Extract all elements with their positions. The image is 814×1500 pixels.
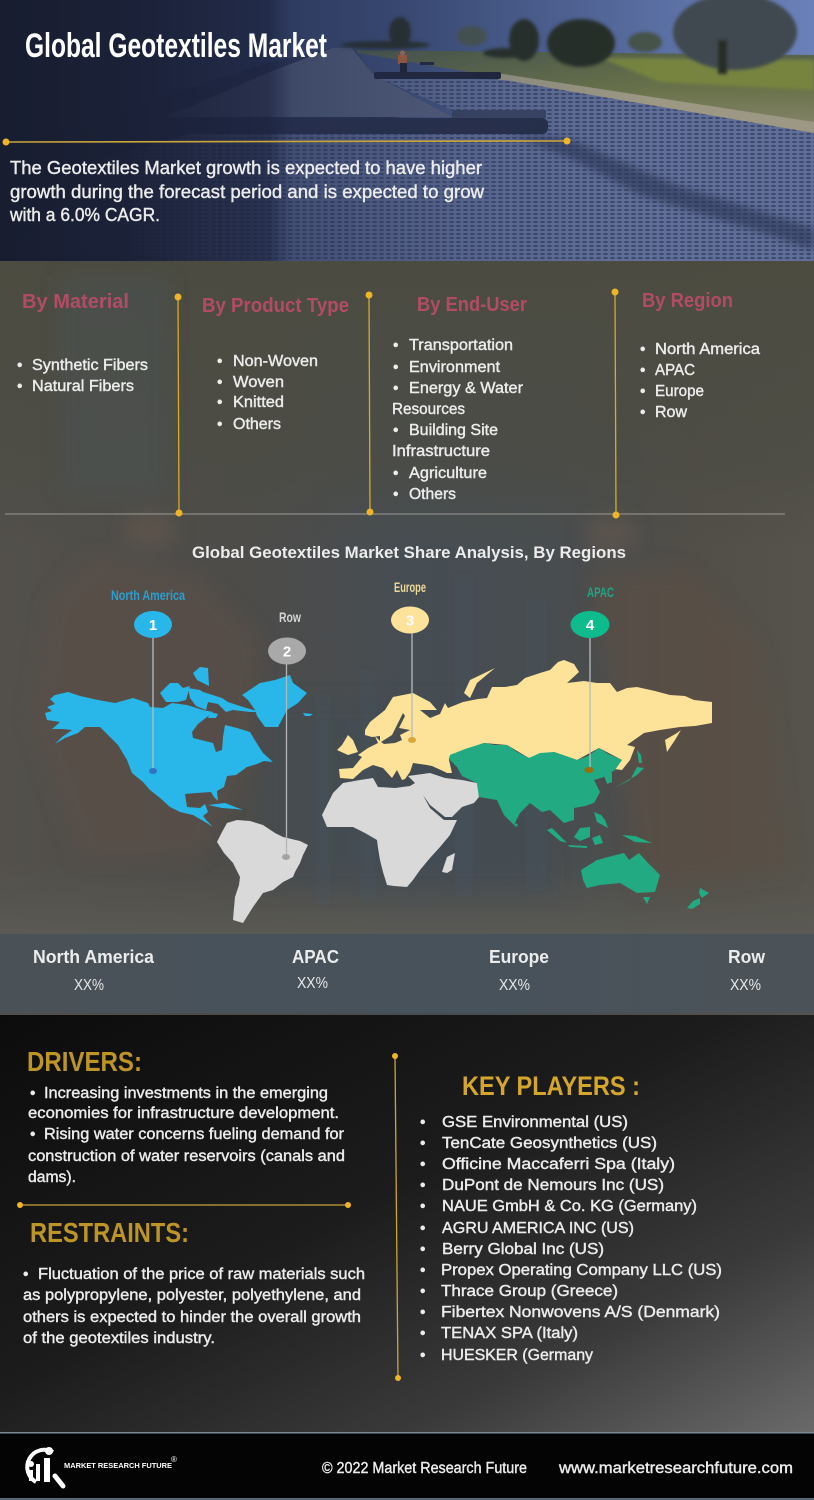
text block: drivers: Increasing investments in the emerging xyxy=(44,1085,328,1102)
list: end-user items: Infrastructure xyxy=(392,443,490,460)
map: South America, Africa and Middle East xyxy=(217,773,479,923)
heading: chart title: Global Geotextiles Market Share Analysis, By Regions xyxy=(192,543,626,562)
panel: by product type xyxy=(202,295,349,433)
list: end-user items: Energy & Water xyxy=(409,380,523,397)
chart: world map by region xyxy=(45,660,712,923)
callout: Row pin: 2 xyxy=(283,644,291,660)
list: material items: Synthetic Fibers xyxy=(32,357,148,374)
list: product type items: Others xyxy=(233,416,281,433)
panel: lower dark background xyxy=(0,1015,814,1433)
list: region items: • xyxy=(640,362,645,379)
list: product type items: • xyxy=(217,416,222,433)
heading: drivers: DRIVERS: xyxy=(27,1046,142,1077)
title: Global Geotextiles Market xyxy=(25,27,327,65)
callout: Europe pin xyxy=(391,579,429,743)
list: end-user items: Others xyxy=(409,486,456,503)
stat: Europe share xyxy=(489,947,549,994)
divider: hero gold line xyxy=(2,138,570,146)
list: key players: • xyxy=(420,1156,425,1173)
list: key players: TenCate Geosynthetics (US) xyxy=(442,1135,657,1152)
list: key players: • xyxy=(420,1347,425,1364)
callout: Europe pin: Europe xyxy=(394,579,426,595)
list: key players: • xyxy=(420,1177,425,1194)
list: region items xyxy=(640,341,760,421)
list: product type items: • xyxy=(217,353,222,370)
stat: North America share: XX% xyxy=(74,977,104,994)
callout: APAC pin xyxy=(570,584,614,773)
list: key players: Propex Operating Company LLC (US) xyxy=(441,1262,722,1279)
list: key players: Officine Maccaferri Spa (Italy) xyxy=(442,1156,675,1173)
text block: drivers: economies for infrastructure development. xyxy=(28,1105,339,1122)
list: key players: GSE Environmental (US) xyxy=(442,1114,628,1131)
list: key players: • xyxy=(420,1325,425,1342)
panel: by material: By Material xyxy=(22,291,129,313)
stat: Europe share: XX% xyxy=(499,977,530,994)
callout: Row pin xyxy=(268,609,306,860)
map: Europe and Russia xyxy=(337,660,712,780)
list: region items: North America xyxy=(655,341,760,358)
list: region items: Europe xyxy=(655,383,704,400)
list: product type items xyxy=(217,353,318,433)
text block: drivers: construction of water reservoirs (canals and xyxy=(28,1148,345,1165)
list: key players: NAUE GmbH & Co. KG (Germany) xyxy=(442,1198,697,1215)
icon: logo xyxy=(27,1447,63,1486)
list: material items xyxy=(17,357,148,395)
list: end-user items: • xyxy=(393,422,398,439)
map: North America xyxy=(45,667,313,827)
list: key players: • xyxy=(420,1262,425,1279)
text block: drivers: dams). xyxy=(28,1169,76,1186)
divider: drivers and restraints xyxy=(17,1202,351,1208)
panel: by product type: By Product Type xyxy=(202,295,349,317)
panel: by region: By Region xyxy=(642,290,733,312)
panel: by end-user xyxy=(392,294,527,503)
list: key players: TENAX SPA (Italy) xyxy=(441,1325,578,1342)
list: end-user items: • xyxy=(393,486,398,503)
text block: restraints: • xyxy=(23,1266,28,1283)
list: product type items: Woven xyxy=(233,374,284,391)
list: end-user items: Building Site xyxy=(409,422,498,439)
logo wordmark xyxy=(64,1455,177,1470)
map: Baltic sea xyxy=(381,713,410,744)
list: end-user items xyxy=(392,337,523,503)
stat: North America share: North America xyxy=(33,947,155,967)
list: key players: AGRU AMERICA INC (US) xyxy=(442,1220,634,1237)
text block: restraints xyxy=(23,1266,365,1347)
list: key players: Thrace Group (Greece) xyxy=(441,1283,618,1300)
callout: APAC pin: APAC xyxy=(587,584,614,600)
callout: North America pin: 1 xyxy=(149,617,157,634)
callout: APAC pin: 4 xyxy=(586,617,595,634)
panel: by material xyxy=(17,291,148,395)
map: Asia Pacific xyxy=(450,743,709,909)
panel: by end-user: By End-User xyxy=(417,294,527,316)
list: key players: • xyxy=(420,1304,425,1321)
panel: by region xyxy=(640,290,760,421)
list: end-user items: • xyxy=(393,359,398,376)
list: region items: Row xyxy=(655,404,688,421)
panel: footer xyxy=(0,1432,814,1500)
list: key players: • xyxy=(420,1283,425,1300)
list: product type items: Knitted xyxy=(233,394,284,411)
panel: region share strip xyxy=(0,934,814,1013)
list: key players: HUESKER (Germany xyxy=(441,1347,593,1364)
stat: APAC share xyxy=(292,947,339,992)
list: key players: • xyxy=(420,1198,425,1215)
copyright: © 2022 Market Research Future xyxy=(322,1460,527,1477)
stat: Row share: XX% xyxy=(730,977,761,994)
list: region items: • xyxy=(640,383,645,400)
text block: restraints: as polypropylene, polyester, polyethylene, and xyxy=(23,1287,361,1304)
list: key players xyxy=(420,1114,722,1364)
list: product type items: • xyxy=(217,394,222,411)
text block: drivers xyxy=(28,1085,345,1186)
list: key players: • xyxy=(420,1220,425,1237)
list: region items: • xyxy=(640,341,645,358)
text block: restraints: others is expected to hinder the overall growth xyxy=(23,1309,361,1326)
list: key players: Fibertex Nonwovens A/S (Denmark) xyxy=(441,1304,720,1321)
dividers: segment columns xyxy=(5,288,785,518)
stat: APAC share: XX% xyxy=(297,975,328,992)
list: material items: • xyxy=(17,378,22,395)
stat: Row share: Row xyxy=(728,947,766,967)
list: end-user items: • xyxy=(393,465,398,482)
list: end-user items: Environment xyxy=(409,359,501,376)
callout: Europe pin: 3 xyxy=(406,612,414,630)
website: www.marketresearchfuture.com xyxy=(558,1460,793,1477)
text block: drivers: • xyxy=(30,1126,35,1143)
text block: intro: with a 6.0% CAGR. xyxy=(9,205,160,225)
stat: Row share xyxy=(728,947,766,994)
text block: drivers: • xyxy=(30,1085,35,1102)
panel: hero photo header xyxy=(0,0,814,261)
list: end-user items: Agriculture xyxy=(409,465,487,482)
list: product type items: Non-Woven xyxy=(233,353,318,370)
heading: restraints: RESTRAINTS: xyxy=(30,1217,189,1248)
logo wordmark: MARKET RESEARCH FUTURE xyxy=(64,1461,172,1470)
callout: Row pin: Row xyxy=(279,609,301,625)
list: end-user items: Transportation xyxy=(409,337,513,354)
stat: Europe share: Europe xyxy=(489,947,549,967)
panel: middle background xyxy=(0,261,814,1015)
callout: North America pin xyxy=(111,587,185,774)
list: key players: • xyxy=(420,1135,425,1152)
list: product type items: • xyxy=(217,374,222,391)
list: key players: • xyxy=(420,1114,425,1131)
list: key players: DuPont de Nemours Inc (US) xyxy=(442,1177,664,1194)
list: region items: • xyxy=(640,404,645,421)
text block: intro xyxy=(9,158,485,225)
heading: key players: KEY PLAYERS : xyxy=(462,1071,640,1101)
stat: North America share xyxy=(33,947,155,994)
logo wordmark: ® xyxy=(171,1455,177,1464)
list: material items: • xyxy=(17,357,22,374)
list: key players: Berry Global Inc (US) xyxy=(442,1241,604,1258)
list: end-user items: • xyxy=(393,337,398,354)
callout: North America pin: North America xyxy=(111,587,185,603)
list: end-user items: Resources xyxy=(392,401,465,418)
text block: intro: The Geotextiles Market growth is expected to have higher xyxy=(10,158,482,178)
divider: lower column xyxy=(392,1053,401,1381)
text block: intro: growth during the forecast period and is expected to grow xyxy=(10,182,485,202)
stat: APAC share: APAC xyxy=(292,947,339,967)
text block: drivers: Rising water concerns fueling demand for xyxy=(44,1126,344,1143)
list: end-user items: • xyxy=(393,380,398,397)
text block: restraints: Fluctuation of the price of raw materials such xyxy=(38,1266,365,1283)
text block: restraints: of the geotextiles industry. xyxy=(23,1330,215,1347)
list: key players: • xyxy=(420,1241,425,1258)
list: region items: APAC xyxy=(655,362,695,379)
list: material items: Natural Fibers xyxy=(32,378,134,395)
